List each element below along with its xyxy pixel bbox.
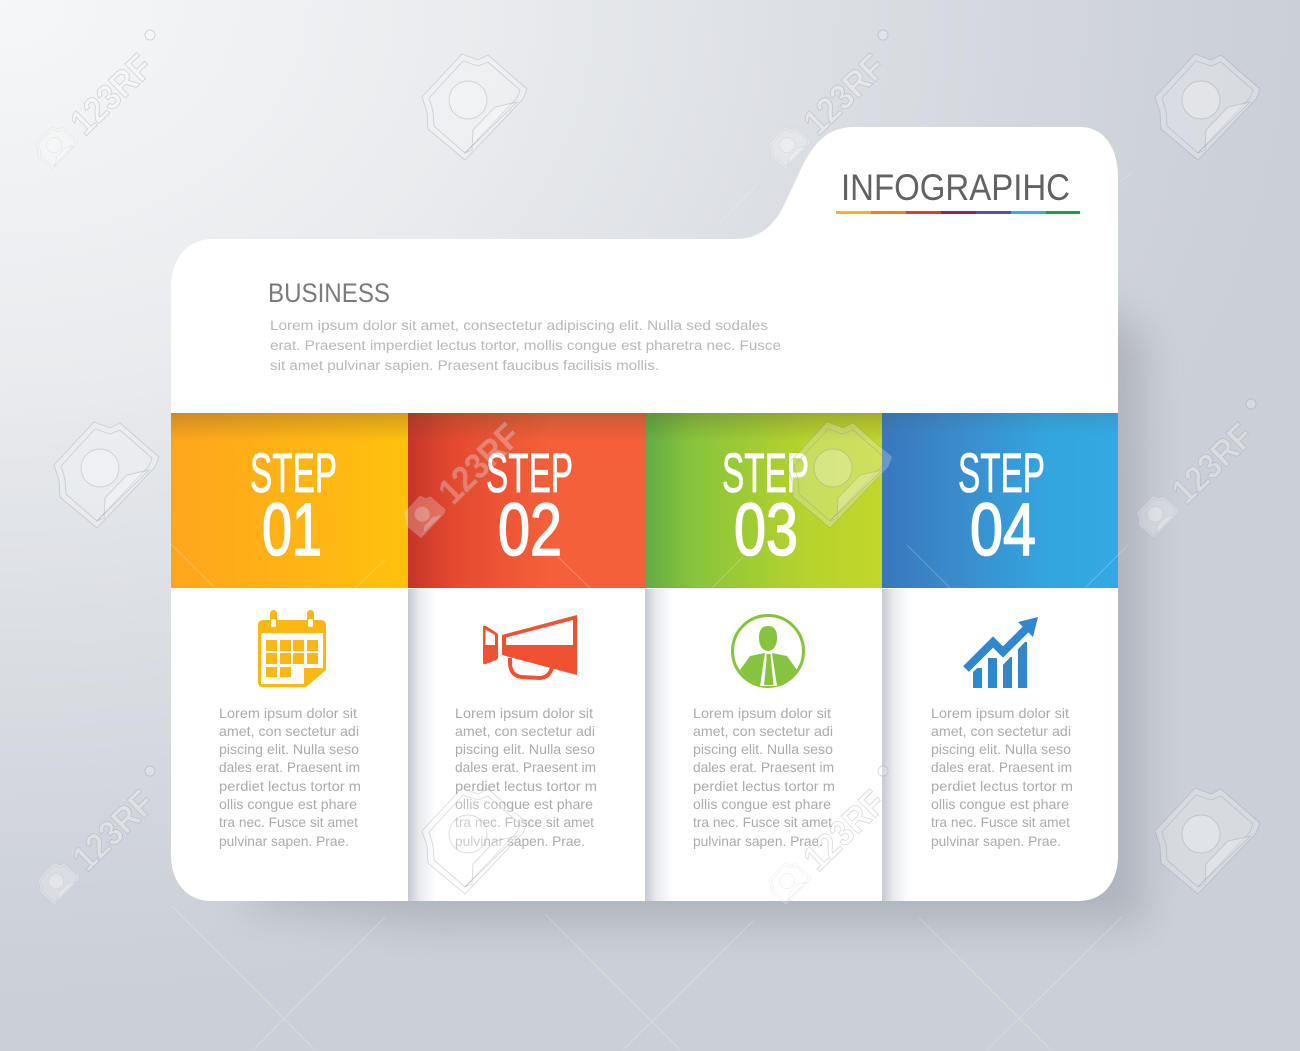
text block: step 03: piscing elit. Nulla seso (693, 741, 833, 757)
text block: step 03: ollis congue est phare (693, 796, 831, 812)
text block: step 02: pulvinar sapen. Prae. (455, 833, 585, 849)
text block: step 02: Lorem ipsum dolor sit (455, 705, 593, 721)
text block: step 04: amet, con sectetur adi (931, 723, 1071, 739)
text block: step 01 (219, 705, 361, 849)
text block: step 02: amet, con sectetur adi (455, 723, 595, 739)
panel: step 01: STEP (250, 441, 337, 504)
text block: step 01: dales erat. Praesent im (219, 759, 360, 775)
text block: step 01: ollis congue est phare (219, 796, 357, 812)
icon: calendar (258, 610, 326, 687)
text block: step 01: piscing elit. Nulla seso (219, 741, 359, 757)
watermarks (36, 30, 1261, 905)
text block: step 04: dales erat. Praesent im (931, 759, 1072, 775)
text block: step 01: tra nec. Fusce sit amet (219, 814, 358, 830)
text block: step 04: perdiet lectus tortor m (931, 778, 1073, 794)
panel: step 02: 02 (498, 488, 562, 571)
panel: step 02: STEP (486, 441, 573, 504)
text block: business: BUSINESS (268, 278, 390, 308)
text block: step 04: ollis congue est phare (931, 796, 1069, 812)
watermarks: 123RF (795, 46, 893, 143)
text block: step 04: Lorem ipsum dolor sit (931, 705, 1069, 721)
watermarks: 123RF (1163, 415, 1261, 512)
text block: step 01: amet, con sectetur adi (219, 723, 359, 739)
text block: step 03: amet, con sectetur adi (693, 723, 833, 739)
panel: step 01: 01 (262, 488, 322, 571)
folder card panel (171, 127, 1118, 901)
panel: step 03: 03 (734, 488, 798, 571)
panel: step 01 (171, 413, 408, 588)
icon: growth chart (962, 617, 1038, 688)
panel: step 02 (408, 413, 645, 588)
column folds (408, 589, 910, 901)
text block: step 02: ollis congue est phare (455, 796, 593, 812)
text block: business: erat. Praesent imperdiet lectus tortor, mollis congue est pharetra nec. Fusce (270, 338, 781, 354)
text block: step 03: dales erat. Praesent im (693, 759, 834, 775)
watermarks: 123RF (795, 782, 893, 879)
text block: step 02: tra nec. Fusce sit amet (455, 814, 594, 830)
watermarks: 123RF (62, 46, 160, 143)
text block: step 03: Lorem ipsum dolor sit (693, 705, 831, 721)
text block: step 03: perdiet lectus tortor m (693, 778, 835, 794)
text block: step 04: pulvinar sapen. Prae. (931, 833, 1061, 849)
rainbow underline (836, 211, 1080, 214)
watermarks: 123RF (430, 415, 528, 512)
heading: infographic: INFOGRAPIHC (841, 167, 1070, 208)
text block: step 02: piscing elit. Nulla seso (455, 741, 595, 757)
panel: step 03 (645, 413, 882, 588)
text block: step 03 (693, 705, 835, 849)
card shadow (230, 300, 1145, 925)
panel: step 04 (882, 413, 1118, 588)
text block: business (268, 278, 781, 374)
text block: step 01: perdiet lectus tortor m (219, 778, 361, 794)
text block: business: sit amet pulvinar sapien. Praesent faucibus facilisis mollis. (270, 358, 659, 374)
text block: step 01: pulvinar sapen. Prae. (219, 833, 349, 849)
text block: step 04: tra nec. Fusce sit amet (931, 814, 1070, 830)
text block: step 03: pulvinar sapen. Prae. (693, 833, 823, 849)
panel: step 04: STEP (958, 441, 1045, 504)
text block: step 03: tra nec. Fusce sit amet (693, 814, 832, 830)
text block: business: Lorem ipsum dolor sit amet, consectetur adipiscing elit. Nulla sed sodales (270, 318, 768, 334)
panel: step 03: STEP (722, 441, 809, 504)
panel: step 04: 04 (970, 488, 1036, 571)
icon: businessman (732, 616, 804, 686)
text block: step 02: perdiet lectus tortor m (455, 778, 597, 794)
icon: megaphone (483, 615, 577, 678)
text block: step 04: piscing elit. Nulla seso (931, 741, 1071, 757)
text block: step 01: Lorem ipsum dolor sit (219, 705, 357, 721)
text block: step 04 (931, 705, 1073, 849)
text block: step 02 (455, 705, 597, 849)
text block: step 02: dales erat. Praesent im (455, 759, 596, 775)
watermarks: 123RF (64, 782, 162, 879)
